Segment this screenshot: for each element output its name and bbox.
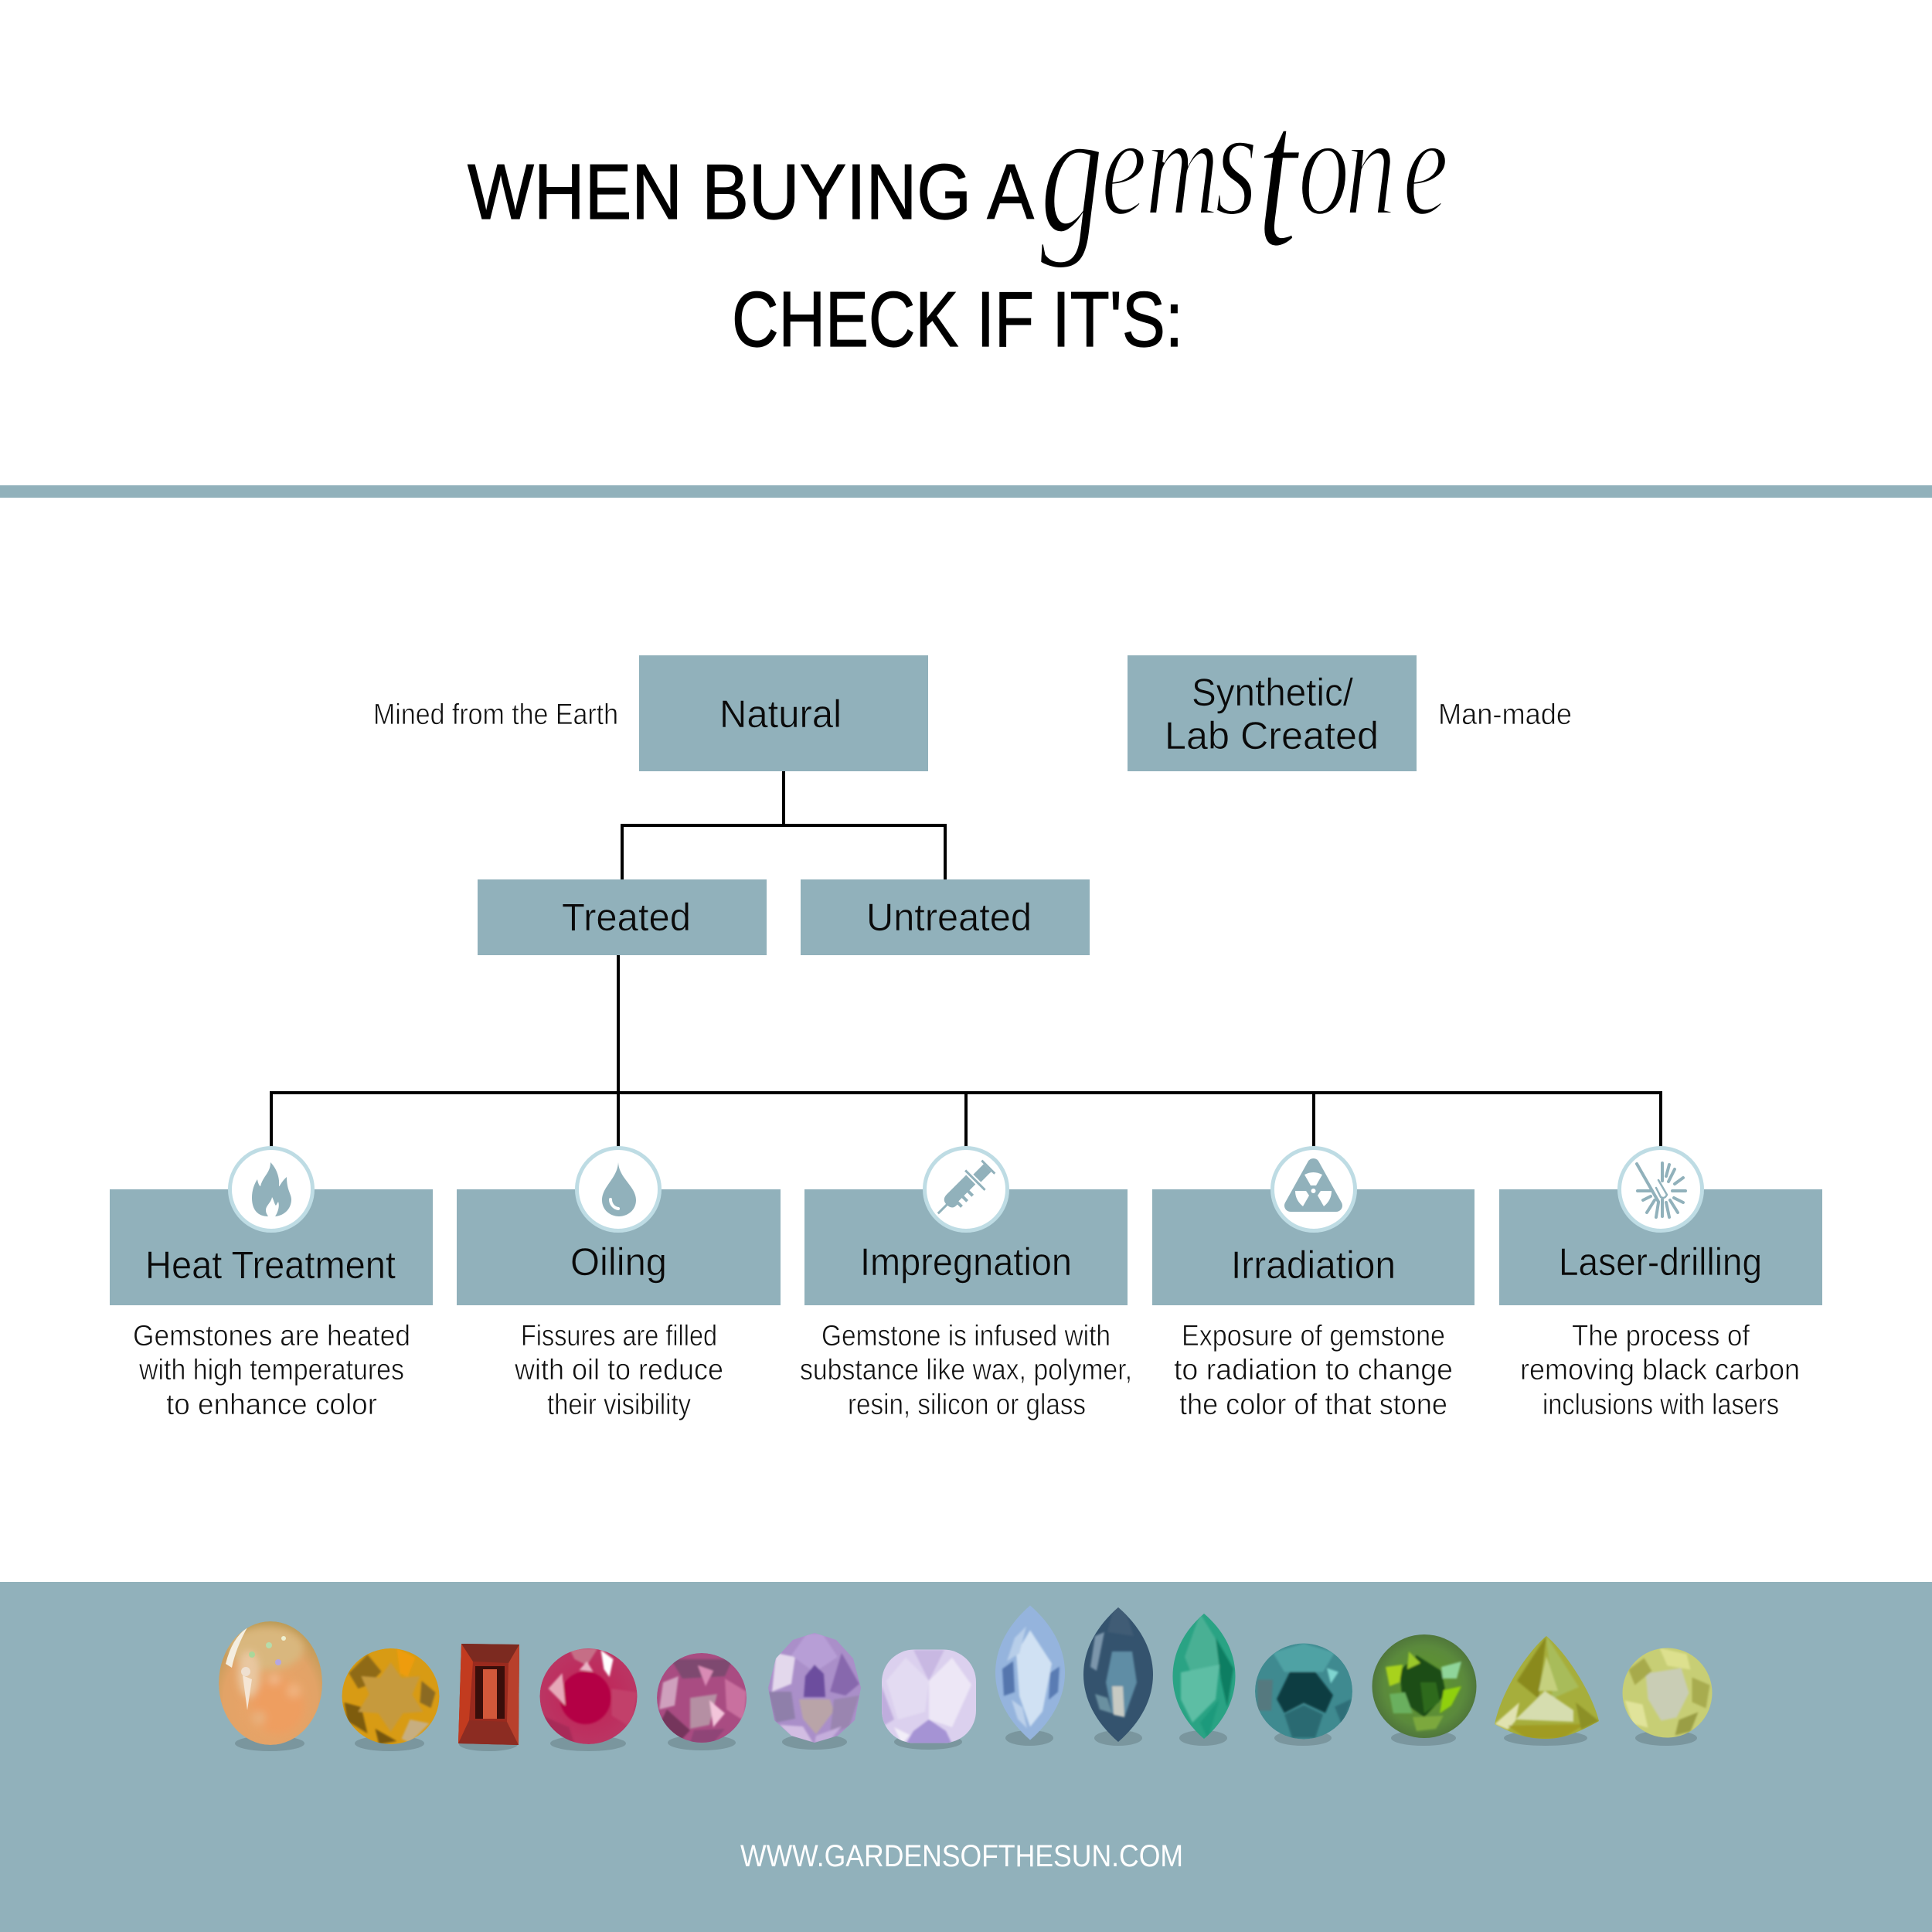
gem: green tourmaline [1372, 1634, 1476, 1738]
title: s [1215, 77, 1258, 248]
panel: impregnation [800, 1148, 1132, 1421]
description: inclusions with lasers [1543, 1389, 1779, 1421]
description: removing black carbon [1520, 1354, 1800, 1386]
gem: citrine [342, 1648, 439, 1744]
description: Gemstones are heated [133, 1320, 410, 1352]
heading: Laser-drilling [1559, 1240, 1762, 1284]
panel: oiling [457, 1148, 781, 1421]
box: natural [639, 655, 928, 771]
title: t [1257, 63, 1301, 289]
description [1520, 1320, 1800, 1421]
description: The process of [1572, 1320, 1750, 1352]
footer band [0, 1582, 1932, 1932]
heading: Heat Treatment [145, 1243, 396, 1287]
gem: garnet baguette [458, 1644, 519, 1745]
heading: Irradiation [1231, 1243, 1396, 1287]
title: e [1101, 87, 1147, 245]
title [468, 63, 1448, 363]
title: g [1040, 73, 1104, 270]
gem: emerald marquise [1173, 1614, 1235, 1739]
gem: rhodolite [657, 1653, 747, 1743]
description: the color of that stone [1179, 1389, 1447, 1421]
description: Fissures are filled [521, 1320, 717, 1352]
description: Gemstone is infused with [821, 1320, 1111, 1352]
gem: opal [219, 1621, 322, 1745]
caption: man-made: Man-made [1438, 699, 1572, 731]
heading: Oiling [570, 1240, 667, 1284]
gem: dark blue marquise [1083, 1607, 1153, 1742]
gem: lavender cushion [881, 1648, 977, 1744]
gem: yellow-green [1621, 1646, 1714, 1739]
icon: radiation triangle [1291, 1165, 1336, 1206]
box: treated: Treated [562, 896, 691, 939]
heading: Impregnation [860, 1240, 1072, 1284]
box: synthetic / lab created: Synthetic/ [1192, 671, 1353, 714]
panel: laser-drilling [1499, 1148, 1822, 1421]
website url: WWW.GARDENSOFTHESUN.COM [740, 1839, 1183, 1873]
title: CHECK IF IT'S: [732, 277, 1183, 363]
description: to enhance color [166, 1389, 377, 1421]
box: synthetic / lab created [1128, 655, 1417, 771]
gem: amethyst [767, 1632, 862, 1743]
divider band [0, 485, 1932, 498]
icon: oil drop [602, 1162, 636, 1216]
panel: irradiation [1152, 1148, 1475, 1421]
title: o [1298, 87, 1349, 245]
box: treated [478, 879, 767, 955]
icon: laser [1637, 1163, 1685, 1217]
gem shadows [235, 1730, 1697, 1751]
title: e [1403, 87, 1448, 245]
icon: flame [252, 1162, 291, 1216]
box: synthetic / lab created: Lab Created [1165, 714, 1379, 757]
box: natural: Natural [719, 692, 842, 736]
gem: teal [1255, 1643, 1352, 1739]
title: m [1145, 87, 1219, 245]
description: to radiation to change [1174, 1354, 1453, 1386]
description [133, 1320, 410, 1421]
connector lines [271, 771, 1661, 1148]
description: substance like wax, polymer, [800, 1354, 1132, 1386]
gem: blue marquise [995, 1606, 1065, 1740]
description: resin, silicon or glass [848, 1389, 1086, 1421]
description: with high temperatures [138, 1354, 404, 1386]
panel: heat treatment [110, 1148, 433, 1421]
description: with oil to reduce [514, 1354, 723, 1386]
title: n [1345, 87, 1396, 245]
gem: ruby [539, 1648, 637, 1744]
description: Exposure of gemstone [1182, 1320, 1445, 1352]
title: WHEN BUYING A [468, 149, 1035, 236]
description [514, 1320, 723, 1421]
box: untreated: Untreated [866, 896, 1032, 939]
description [800, 1320, 1132, 1421]
icon: syringe [930, 1156, 999, 1225]
box: untreated [801, 879, 1090, 955]
description [1174, 1320, 1453, 1421]
gem: trillion [1492, 1633, 1600, 1741]
description: their visibility [547, 1389, 691, 1421]
caption: mined from the earth: Mined from the Earth [373, 699, 618, 731]
